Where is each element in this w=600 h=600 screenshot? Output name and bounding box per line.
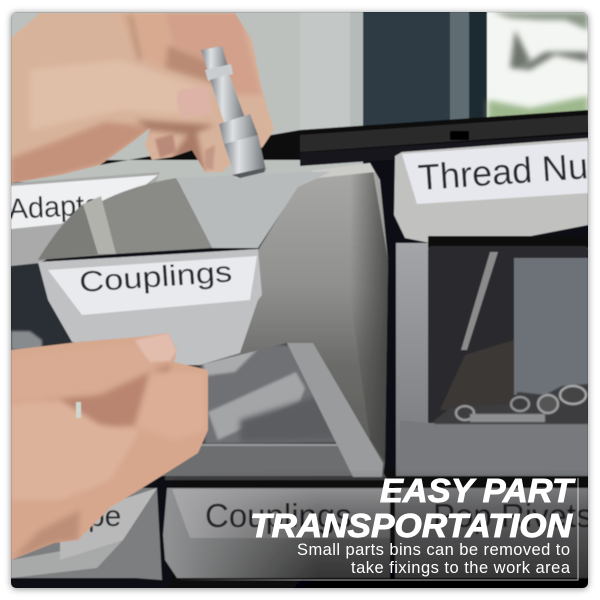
caption title: EASY PART bbox=[380, 472, 576, 509]
bottom row: bin Couplings bbox=[163, 488, 390, 578]
lower hand bbox=[11, 333, 208, 560]
caption description: take fixings to the work area bbox=[351, 559, 571, 577]
label text: Couplings: Couplings bbox=[205, 497, 352, 534]
bin: Thread Nuts bbox=[394, 138, 600, 243]
caption frame line bbox=[180, 478, 578, 580]
photo background: wall and window bbox=[11, 12, 588, 182]
caption title bbox=[250, 472, 576, 544]
steel knob behind bin bbox=[11, 331, 42, 350]
caption description bbox=[297, 541, 571, 577]
metal fitting held in fingers bbox=[201, 46, 266, 178]
ring glint between fingers bbox=[76, 402, 81, 418]
label text: Pipe: pe bbox=[88, 500, 121, 533]
caption description: Small parts bins can be removed to bbox=[297, 541, 570, 559]
bin: Adapters bbox=[8, 172, 160, 266]
bin: lower contents with fittings bbox=[150, 340, 388, 480]
black shelf frame bbox=[11, 110, 588, 362]
bin: Couplings pulled out bbox=[38, 163, 388, 477]
upper hand bbox=[11, 12, 274, 186]
bottom row: bin with label pe bbox=[11, 488, 162, 580]
nuts in bin bbox=[433, 384, 588, 424]
caption background gradient bbox=[170, 470, 590, 590]
bottom row: bin Pop Rivets bbox=[395, 488, 593, 578]
bin: lower right window with nuts bbox=[396, 236, 588, 476]
label text: Adapters: Adapte bbox=[8, 189, 101, 226]
caption title: TRANSPORTATION bbox=[250, 507, 573, 544]
label text: Pop Rivets: Pop Rivets bbox=[433, 497, 593, 534]
label text: Couplings: Couplings bbox=[78, 256, 233, 299]
